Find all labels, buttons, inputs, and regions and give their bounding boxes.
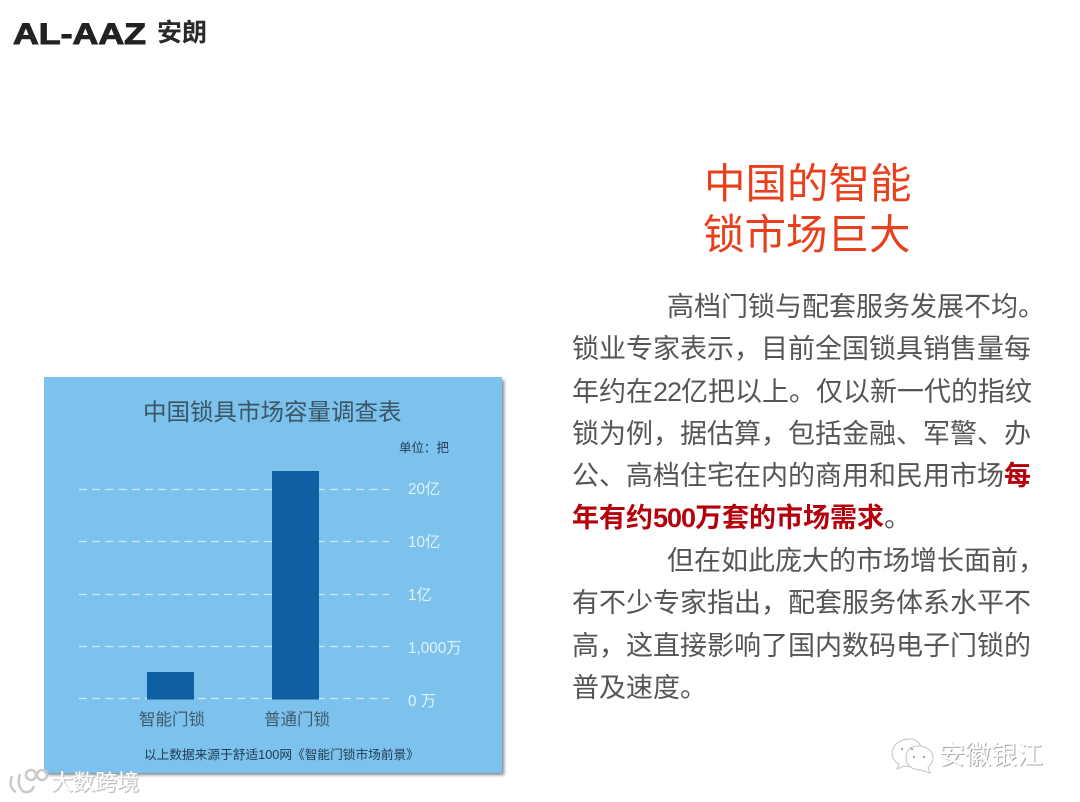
- axis labels: 1亿: [408, 587, 432, 604]
- logo: AL-AAZ 安朗: AL-AAZ: [13, 18, 146, 51]
- watermark: bottom left: [10, 768, 140, 796]
- body text: 高档门锁与配套服务发展不均。: [667, 292, 1045, 322]
- body text: 年有约500万套的市场需求。: [572, 503, 911, 533]
- bar: ordinary locks: [272, 471, 319, 700]
- panel: market capacity chart: [44, 377, 506, 778]
- body text: 公、高档住宅在内的商用和民用市场每: [572, 461, 1031, 491]
- watermark: bottom left: 大数跨境: [51, 770, 139, 795]
- bar: smart locks: [147, 672, 194, 700]
- watermark: bottom right with wechat icon: 安徽银江: [939, 740, 1043, 770]
- body text: 年约在22亿把以上。仅以新一代的指纹: [572, 377, 1032, 407]
- body text: 高，这直接影响了国内数码电子门锁的: [572, 631, 1031, 661]
- axis labels: [408, 481, 462, 710]
- category labels: [139, 710, 330, 729]
- axis labels: 1,000万: [408, 640, 462, 657]
- body text: 有不少专家指出，配套服务体系水平不: [572, 588, 1031, 618]
- watermark: bottom right with wechat icon: 安徽银江: [940, 741, 1044, 771]
- body text: 锁为例，据估算，包括金融、军警、办: [572, 419, 1031, 449]
- body text: 但在如此庞大的市场增长面前，: [667, 546, 1045, 576]
- body text: 锁业专家表示，目前全国锁具销售量每: [572, 334, 1031, 364]
- gridlines: [79, 490, 389, 698]
- title: 中国的智能: [704, 160, 912, 207]
- watermark: bottom right with wechat icon: [892, 738, 1044, 774]
- category labels: 普通门锁: [264, 710, 330, 729]
- axis labels: 20亿: [408, 481, 440, 498]
- title: 锁市场巨大: [703, 211, 911, 258]
- body text: [572, 292, 1045, 703]
- unit label: 单位：把: [399, 440, 450, 455]
- panel shadow and background: [44, 377, 504, 775]
- category labels: 智能门锁: [139, 710, 205, 729]
- watermark: bottom left: 大数跨境: [52, 771, 140, 796]
- logo: AL-AAZ 安朗: [13, 18, 207, 51]
- logo: AL-AAZ 安朗: 安朗: [157, 19, 207, 47]
- axis labels: 0 万: [408, 693, 436, 710]
- icon: wechat bubbles: [892, 739, 933, 773]
- data source: 以上数据来源于舒适100网《智能门锁市场前景》: [144, 747, 419, 762]
- chart title: 中国锁具市场容量调查表: [143, 399, 402, 425]
- title: [703, 160, 912, 258]
- body text: 普及速度。: [572, 673, 707, 703]
- axis labels: 10亿: [408, 534, 440, 551]
